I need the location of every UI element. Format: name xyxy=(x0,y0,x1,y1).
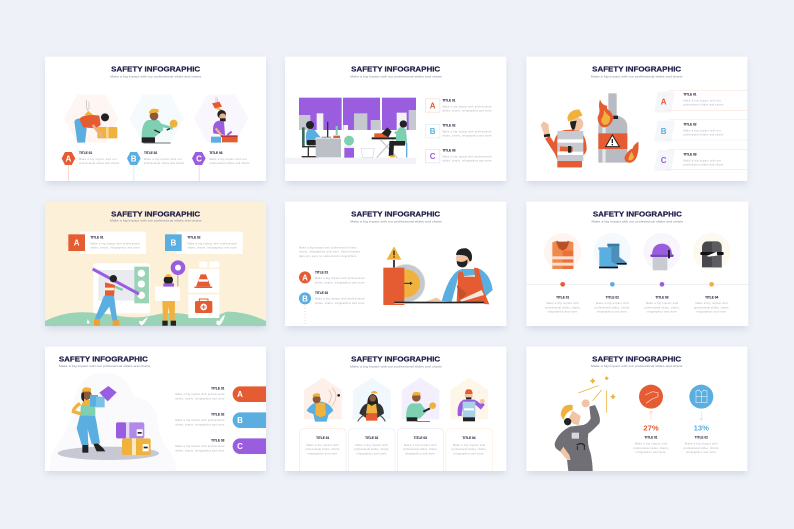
text block 03 xyxy=(644,295,680,313)
worker with bar xyxy=(94,275,123,326)
text block 02 xyxy=(144,151,185,165)
subtitle: Make a big impact with our professional slides and charts xyxy=(110,74,202,78)
row A: A xyxy=(661,98,667,107)
subtitle: Make a big impact with our professional slides and charts xyxy=(350,219,442,223)
card 02 xyxy=(349,429,395,471)
text block 02: TITLE 02 xyxy=(606,295,619,299)
figure: worker with vest xyxy=(358,391,385,421)
card 04: infographics and more. xyxy=(454,452,485,455)
text block 02 xyxy=(175,413,225,426)
circle B with dotted line: B xyxy=(302,294,308,303)
text block 01: slides, charts, infographics and more xyxy=(315,281,365,284)
slide 8: four house cards xyxy=(285,347,506,474)
badge A: A xyxy=(65,154,71,163)
card B xyxy=(165,232,243,254)
text block 02: infographics and more. xyxy=(597,310,628,313)
card 02: professional slides, charts, xyxy=(354,448,389,451)
text block 03: slides, charts, infographics and more xyxy=(442,159,492,162)
text block 02: slides, charts, infographics and more xyxy=(315,302,365,305)
slide 3: fire hazard xyxy=(526,57,747,184)
title: SAFETY INFOGRAPHIC xyxy=(351,65,441,74)
card 03: professional slides, charts, xyxy=(403,448,438,451)
bin xyxy=(361,148,374,158)
plant xyxy=(344,136,354,158)
text block 03: slides, charts, infographics and more xyxy=(175,449,225,452)
card 03 xyxy=(397,429,444,471)
text block 01: TITLE 01 xyxy=(442,98,456,102)
label C xyxy=(425,149,440,163)
row B: Make a big impact with our xyxy=(683,130,721,133)
card 02: Make a big impact with xyxy=(355,444,388,447)
text block 01: TITLE 01 xyxy=(315,270,328,274)
figure: worker lifting box xyxy=(74,100,117,143)
text block 03 xyxy=(175,439,225,452)
row A: TITLE 01 xyxy=(683,93,697,97)
saw machine xyxy=(383,264,425,305)
card 01: professional slides, charts, xyxy=(305,448,340,451)
text block 01: professional slides and charts xyxy=(79,162,120,165)
title: SAFETY INFOGRAPHIC xyxy=(592,65,682,74)
text block 02 xyxy=(684,436,719,454)
text block 01: TITLE 01 xyxy=(79,151,92,155)
text block 01 xyxy=(79,151,120,165)
worker carrying boxes xyxy=(73,386,117,453)
row B xyxy=(654,120,747,142)
card 02: infographics and more. xyxy=(356,452,387,455)
floor shadow xyxy=(58,447,159,460)
circle B with dotted line xyxy=(299,292,311,326)
text block 01 xyxy=(175,387,225,400)
figure: worker with gear xyxy=(406,392,436,421)
title: SAFETY INFOGRAPHIC xyxy=(592,355,682,364)
text block 01 xyxy=(442,98,492,112)
card A: Make a big impact with professional xyxy=(90,242,140,245)
subtitle: Make a big impact with our professional slides and charts xyxy=(59,364,151,368)
checklist window xyxy=(93,263,150,313)
text block 01: Make a big impact with professional xyxy=(442,105,492,108)
row A: Make a big impact with our xyxy=(683,100,721,103)
office illustration xyxy=(285,98,416,164)
card A: TITLE 01 xyxy=(90,236,104,240)
slide 6: protective equipment timeline xyxy=(526,202,748,329)
worker raising fist xyxy=(555,399,600,471)
circle A: A xyxy=(302,273,308,282)
text block 01: Make a big impact with xyxy=(635,443,668,446)
slide 4: cream checklist scene xyxy=(45,202,266,329)
text block 02: slides, charts, infographics and more xyxy=(442,134,492,137)
stat 27%: 27% xyxy=(643,424,659,433)
arrow down xyxy=(700,411,703,420)
tab B xyxy=(233,412,266,428)
row C: Make a big impact with our xyxy=(683,160,721,163)
stat 13%: 13% xyxy=(694,424,709,433)
intro paragraph: charts, infographics and more. Each template xyxy=(299,251,361,254)
card 01: infographics and more. xyxy=(307,452,338,455)
row B: TITLE 02 xyxy=(683,123,697,127)
text block 03: professional slides and charts xyxy=(209,162,250,165)
text block 02: TITLE 02 xyxy=(315,291,328,295)
text block 04: infographics and more. xyxy=(696,310,727,313)
text block 03: TITLE 03 xyxy=(442,148,456,152)
text block 01: slides, charts, infographics and more xyxy=(442,109,492,112)
text block 02: professional slides, charts, xyxy=(684,447,719,450)
icon: welding shield xyxy=(700,241,724,267)
row C: professional slides and charts xyxy=(683,164,724,167)
slide 9: percentages xyxy=(526,347,747,474)
title: SAFETY INFOGRAPHIC xyxy=(111,65,201,74)
hexagon backgrounds xyxy=(64,94,248,143)
card A xyxy=(68,232,146,254)
badge C: C xyxy=(196,154,202,163)
card B: Make a big impact with professional xyxy=(187,242,237,245)
subtitle: Make a big impact with our professional slides and charts xyxy=(110,219,202,223)
text block 01: infographics and more. xyxy=(636,451,667,454)
badge C xyxy=(192,152,206,182)
tab B: B xyxy=(237,416,243,425)
text block 04 xyxy=(694,295,730,313)
row C xyxy=(654,149,747,171)
tab C xyxy=(233,438,266,454)
card A: A xyxy=(74,239,80,248)
card B: B xyxy=(170,239,176,248)
icon: orange circle xyxy=(639,385,663,409)
text block 03: Make a big impact with our xyxy=(209,158,247,161)
card 04: TITLE 04 xyxy=(462,436,476,440)
text block 03: Make a big impact with xyxy=(646,302,679,305)
figure: worker waving xyxy=(459,389,485,421)
row A xyxy=(654,91,747,113)
text block 02: Make a big impact with xyxy=(596,302,629,305)
warning sign xyxy=(387,246,401,268)
label A: A xyxy=(430,102,436,111)
background blob xyxy=(50,373,176,471)
tab A: A xyxy=(237,390,243,399)
text block 01: professional slides, charts, xyxy=(545,306,581,309)
card B: slides, charts, infographics and more xyxy=(187,246,237,249)
first aid panel xyxy=(188,294,219,318)
row C: TITLE 03 xyxy=(683,153,697,157)
text block 01: slides, charts, infographics and more xyxy=(175,397,225,400)
text block 04: TITLE 04 xyxy=(705,295,718,299)
text block 02: professional slides, charts, xyxy=(595,306,630,309)
text block 02: TITLE 02 xyxy=(211,413,225,417)
row B: B xyxy=(661,127,667,136)
text block 03: infographics and more. xyxy=(647,310,678,313)
text block 03: TITLE 03 xyxy=(211,439,225,443)
card 02: TITLE 02 xyxy=(365,436,378,440)
card 01 xyxy=(300,429,346,471)
slide 5: saw hazard xyxy=(285,202,506,329)
text block 03 xyxy=(442,148,492,162)
row A: professional slides and charts xyxy=(683,104,724,107)
card 03: TITLE 03 xyxy=(414,436,427,440)
text block 01 xyxy=(315,270,365,284)
card 03: infographics and more. xyxy=(405,452,436,455)
icon: safety vest xyxy=(552,241,573,269)
check marks xyxy=(87,314,225,326)
arrow up xyxy=(649,411,653,420)
text block 02: Make a big impact with professional xyxy=(315,298,365,301)
left worker xyxy=(302,121,341,157)
text block 01: professional slides, charts, xyxy=(633,447,669,450)
badge B: B xyxy=(131,154,137,163)
label B: B xyxy=(430,127,436,136)
text block 01 xyxy=(633,436,669,454)
text block 01: TITLE 01 xyxy=(556,295,569,299)
hills xyxy=(45,312,266,326)
text block 02: TITLE 02 xyxy=(695,436,708,440)
slide 7: worker with boxes and tabs xyxy=(45,347,266,474)
gas cylinder with flames xyxy=(598,93,639,163)
text block 02 xyxy=(595,295,630,313)
icon: blue circle with vest xyxy=(689,385,713,409)
house backgrounds xyxy=(304,378,488,419)
worker with sign xyxy=(155,260,185,326)
text block 01: TITLE 01 xyxy=(644,436,658,440)
carpenter xyxy=(426,248,493,304)
card 03: Make a big impact with xyxy=(404,444,437,447)
subtitle: Make a big impact with our professional slides and charts xyxy=(591,74,683,78)
circle A xyxy=(299,271,311,283)
subtitle: Make a big impact with our professional slides and charts xyxy=(591,219,684,223)
text block 03 xyxy=(209,151,250,165)
title: SAFETY INFOGRAPHIC xyxy=(351,210,441,219)
title: SAFETY INFOGRAPHIC xyxy=(593,210,682,219)
text block 03: TITLE 03 xyxy=(655,295,669,299)
text block 03: professional slides, charts, xyxy=(644,306,680,309)
text block 01 xyxy=(545,295,581,313)
label C: C xyxy=(430,152,436,161)
text block 02: slides, charts, infographics and more xyxy=(175,423,225,426)
title: SAFETY INFOGRAPHIC xyxy=(351,355,441,364)
text block 01: Make a big impact with professional xyxy=(175,393,225,396)
text block 01: infographics and more. xyxy=(547,310,578,313)
label B xyxy=(425,124,440,138)
text block 03: TITLE 03 xyxy=(209,151,223,155)
card B: TITLE 02 xyxy=(187,236,201,240)
timeline line and dots xyxy=(526,282,748,287)
title: SAFETY INFOGRAPHIC xyxy=(111,209,201,218)
work table xyxy=(394,302,484,304)
right worker and table xyxy=(372,120,407,158)
text block 02: Make a big impact with xyxy=(685,443,718,446)
title: SAFETY INFOGRAPHIC xyxy=(59,354,148,363)
subtitle: Make a big impact with our professional slides and charts xyxy=(591,364,683,368)
figure: worker on phone xyxy=(307,388,340,422)
sparkles xyxy=(578,377,615,413)
text block 01: Make a big impact with our xyxy=(79,158,117,161)
text block 01: TITLE 01 xyxy=(211,387,225,391)
intro paragraph: data sits easy to understand infographics xyxy=(299,255,357,258)
figure: worker with gear xyxy=(142,109,178,143)
icon circles xyxy=(544,233,730,270)
badge B xyxy=(127,152,141,182)
tab A xyxy=(233,386,266,402)
row B: professional slides and charts xyxy=(683,134,724,137)
text block 02: infographics and more. xyxy=(686,451,717,454)
card 04 xyxy=(446,429,492,471)
intro paragraph xyxy=(299,246,361,258)
figure: worker under falling object xyxy=(211,97,238,143)
label A xyxy=(425,99,440,112)
card 01: Make a big impact with xyxy=(306,444,339,447)
text block 01: Make a big impact with professional xyxy=(315,277,365,280)
slide 2: office scene xyxy=(285,57,506,184)
text block 04: Make a big impact with xyxy=(695,302,728,305)
card 01: TITLE 01 xyxy=(316,436,329,440)
card 04: Make a big impact with xyxy=(453,444,486,447)
text block 02: TITLE 02 xyxy=(442,123,456,127)
badge A xyxy=(62,152,75,182)
text block 04: professional slides, charts, xyxy=(694,306,730,309)
text block 02 xyxy=(315,291,365,305)
tab C: C xyxy=(237,442,243,451)
text block 03: Make a big impact with professional xyxy=(442,155,492,158)
subtitle: Make a big impact with our professional slides and charts xyxy=(350,74,442,78)
row C: C xyxy=(661,156,667,165)
card 04: professional slides, charts, xyxy=(452,448,487,451)
icon: boots xyxy=(598,244,627,268)
text block 02 xyxy=(442,123,492,137)
text block 03: Make a big impact with professional xyxy=(175,445,225,448)
text block 02: professional slides and charts xyxy=(144,162,185,165)
boxes xyxy=(116,422,151,455)
subtitle: Make a big impact with our professional slides and charts xyxy=(350,364,442,368)
text block 02: Make a big impact with our xyxy=(144,158,182,161)
text block 02: Make a big impact with professional xyxy=(175,419,225,422)
worker in hi-vis vest xyxy=(541,109,587,167)
slide 1: three hexagon workers xyxy=(45,57,266,184)
text block 02: TITLE 02 xyxy=(144,151,157,155)
text block 01: Make a big impact with xyxy=(546,302,579,305)
cone panel xyxy=(188,262,219,293)
intro paragraph: Make a big impact with professional slides, xyxy=(299,246,358,249)
text block 02: Make a big impact with professional xyxy=(442,130,492,133)
card A: slides, charts, infographics and more xyxy=(90,246,140,249)
icon: helmet with visor xyxy=(650,244,674,270)
